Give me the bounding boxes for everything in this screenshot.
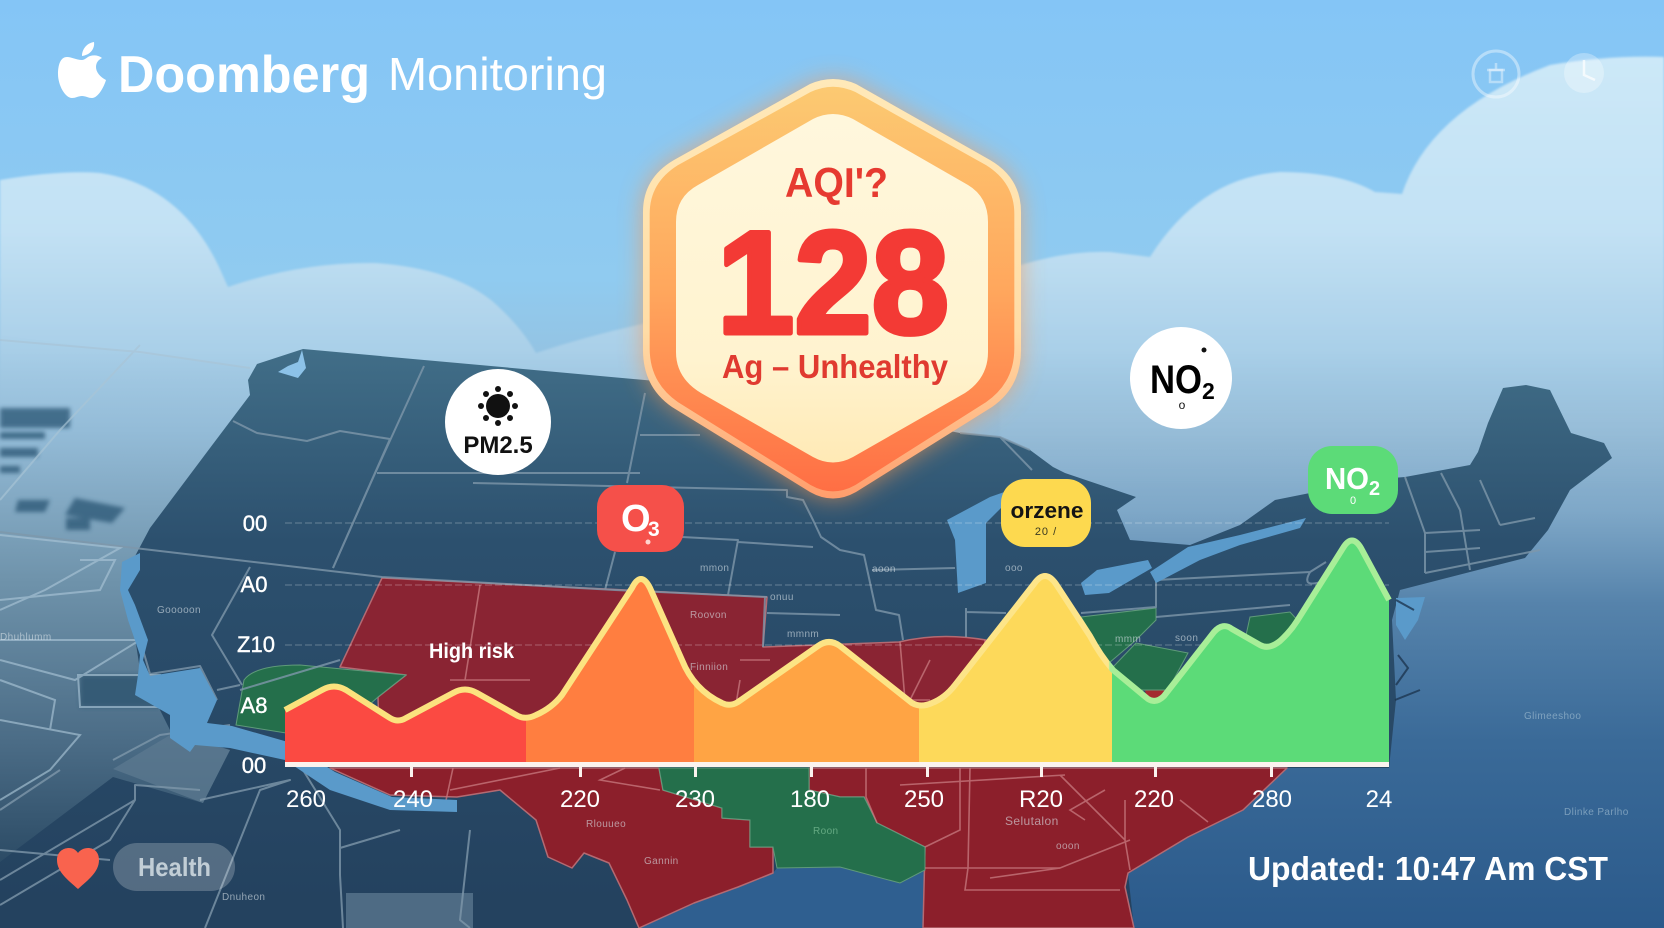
map: state border lines [0, 366, 1540, 928]
chart: x axis baseline and ticks [285, 762, 1389, 777]
map: small place labels: ooo [1005, 563, 1023, 574]
badge cream centre [676, 114, 988, 462]
map: main land mass [0, 349, 1612, 928]
map: dark blocks in the hazy west [0, 408, 160, 707]
pollutant badge: O3: O [621, 498, 651, 540]
chart: x axis labels: 260 [286, 786, 326, 813]
wordmark: Doomberg [118, 46, 370, 104]
pollutant badge: NO2 white circle: o [1179, 398, 1186, 412]
pollutant badge: NO2 green: 0 [1350, 495, 1356, 507]
icon: apple [58, 42, 106, 98]
map: small place labels: Roon [813, 826, 839, 837]
pollutant badge: NO2 green [1308, 446, 1398, 514]
badge band [650, 87, 1014, 491]
pollutant badge: NO2 white circle: 2 [1202, 378, 1215, 404]
map label: high risk: High risk [429, 640, 514, 663]
map: small place labels: Finniion [690, 662, 728, 673]
map: small place labels: Roovon [690, 610, 727, 621]
clouds [0, 57, 1664, 520]
chart: x axis labels: R20 [1019, 786, 1063, 813]
chart: y axis labels: Z10 [237, 632, 275, 657]
hexagon AQI badge [643, 79, 1021, 498]
map: small place labels: mmon [700, 563, 729, 574]
map: small place labels: Dlinke Parlho [1564, 807, 1629, 818]
badge rim [643, 79, 1021, 498]
map: western land fading into haze [0, 335, 260, 900]
chart: x axis labels: 220 [560, 786, 600, 813]
map: small place labels: aoon [872, 564, 896, 575]
chart: x axis labels: 240 [393, 786, 433, 813]
pollutant badge: ozone [1001, 479, 1091, 547]
badge label: AQI'? [785, 159, 888, 206]
icon: heart [57, 848, 99, 889]
pollutant badge: PM2.5 [445, 369, 551, 475]
map: west river and gulf coast water [120, 553, 457, 812]
chart: x axis labels: 220 [1134, 786, 1174, 813]
pollutant badge: NO2 white circle [1130, 327, 1232, 429]
pollutant badge: O3 [597, 485, 684, 552]
chart: x axis labels: 250 [904, 786, 944, 813]
pollutant badge: NO2 green: 2 [1369, 478, 1380, 500]
AQI status: Ag – Unhealthy [722, 348, 949, 385]
map: small place labels: Gooooon [157, 605, 201, 616]
logo [58, 42, 607, 104]
label: PM2.5 [463, 432, 533, 459]
chart: x axis labels: 24 [1366, 786, 1392, 813]
chart: y axis labels: A0 [241, 572, 267, 597]
icon: sun [478, 386, 518, 426]
updated timestamp: Updated: 10:47 Am CST [1248, 850, 1608, 887]
map: small place labels: mmm [1115, 634, 1141, 645]
map: small place labels: ooon [1056, 841, 1080, 852]
pollutant badge: NO2 white circle: NO [1150, 358, 1202, 402]
AQI value: 128 [717, 201, 949, 364]
map: small place labels: Rlouueo [586, 819, 626, 830]
subtitle: Monitoring [388, 48, 607, 100]
map: small place labels [0, 563, 1629, 903]
chart: coloured area [285, 544, 1389, 762]
chart: trend line [285, 540, 1389, 720]
icon: top right trash button [1473, 51, 1519, 97]
map: small place labels: Gannin [644, 856, 679, 867]
map: small place labels: mmnm [787, 629, 819, 640]
chart: gridlines [285, 523, 1389, 645]
health pill [113, 843, 235, 891]
map: small place labels: soon [1175, 633, 1198, 644]
chart: y axis labels: 00 [242, 753, 266, 778]
map: small place labels: Dnuheon [222, 892, 265, 903]
chart: y axis labels [237, 511, 275, 778]
map: red high-risk states [330, 578, 1287, 928]
map: small place labels: Selutalon [1005, 814, 1059, 828]
chart: y axis labels: A8 [241, 693, 267, 718]
map: haze region border lines [0, 340, 250, 800]
chart: x axis labels: 280 [1252, 786, 1292, 813]
map: lighter slab regions [113, 735, 473, 928]
badge glow [645, 82, 1019, 496]
map: great lakes water [278, 350, 1425, 640]
map: green low-risk states [236, 608, 1302, 883]
pollutant badge: O3: 3 [648, 518, 660, 541]
icon: top right clock button [1564, 53, 1604, 93]
chart: y axis labels: 00 [243, 511, 267, 536]
pollutant badge: NO2 green: NO [1325, 461, 1369, 496]
map: small place labels: onuu [770, 592, 794, 603]
map: small place labels: Glimeeshoo [1524, 711, 1581, 722]
map: state lines inside red regions [445, 585, 1208, 890]
map: small place labels: Dhuhlumm [0, 632, 52, 643]
map: dark north-east coast marks [1395, 600, 1420, 700]
chart: x axis labels [286, 786, 1392, 813]
map: gulf water [640, 867, 925, 928]
chart: x axis labels: 230 [675, 786, 715, 813]
chart: x axis labels: 180 [790, 786, 830, 813]
pollutant badge: ozone: 20 / [1035, 526, 1057, 538]
pollutant badge: ozone: orzene [1010, 498, 1084, 523]
health pill: Health [138, 852, 211, 882]
